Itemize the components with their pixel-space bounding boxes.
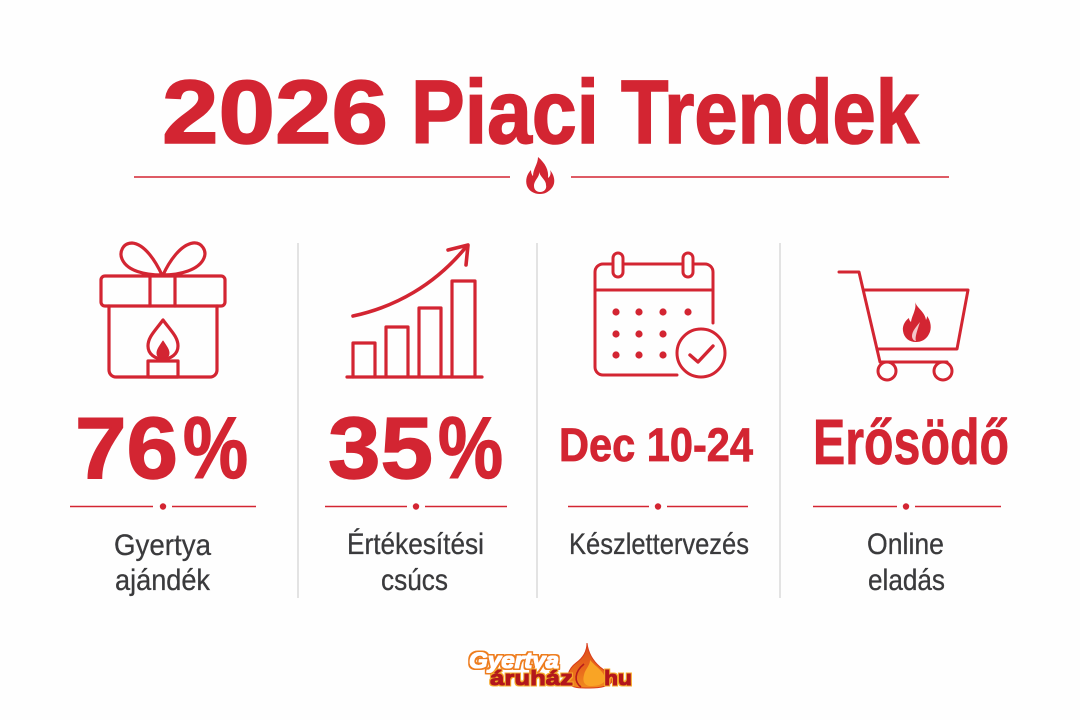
value: % — [438, 400, 503, 497]
column dividers — [298, 243, 780, 598]
divider with dot — [70, 503, 256, 510]
icon: shopping cart with flame — [839, 272, 968, 380]
divider with dot — [325, 503, 507, 510]
icon: calendar with check — [595, 253, 725, 377]
divider with dot — [813, 503, 1001, 510]
label: eladás — [868, 564, 945, 597]
title: Piaci — [411, 63, 599, 163]
value: 35 — [328, 400, 433, 497]
label: Értékesítési — [347, 528, 484, 561]
label: csúcs — [381, 564, 448, 597]
value: Erősödő — [813, 406, 1009, 478]
label — [347, 528, 484, 597]
title divider with flame — [134, 157, 949, 194]
icon: logo flame — [568, 643, 612, 688]
label: Készlettervezés — [569, 528, 749, 561]
label: ajándék — [115, 564, 211, 597]
panel: sales peak statistic — [325, 245, 507, 597]
logo: Gyertya áruház hu — [469, 643, 632, 690]
panel: stock planning statistic — [559, 253, 753, 561]
title: 2026 — [162, 63, 388, 163]
value: % — [183, 400, 248, 497]
value: 76 — [75, 400, 178, 497]
icon: title flame — [526, 157, 554, 194]
label — [867, 528, 945, 597]
logo text: hu: hu — [604, 668, 632, 690]
icon: rising bar chart with arrow — [347, 245, 482, 377]
divider with dot — [568, 503, 748, 510]
label: Gyertya — [114, 529, 211, 562]
value: Dec 10-24 — [559, 418, 753, 471]
icon: gift with candle — [101, 243, 225, 377]
panel: gift statistic — [70, 243, 256, 597]
logo text: áruház: áruház — [490, 668, 573, 690]
label — [114, 529, 211, 597]
panel: online sales statistic — [813, 272, 1009, 597]
label: Online — [867, 528, 944, 561]
title: Trendek — [621, 63, 920, 163]
logo text: Gyertya: Gyertya — [469, 648, 559, 673]
